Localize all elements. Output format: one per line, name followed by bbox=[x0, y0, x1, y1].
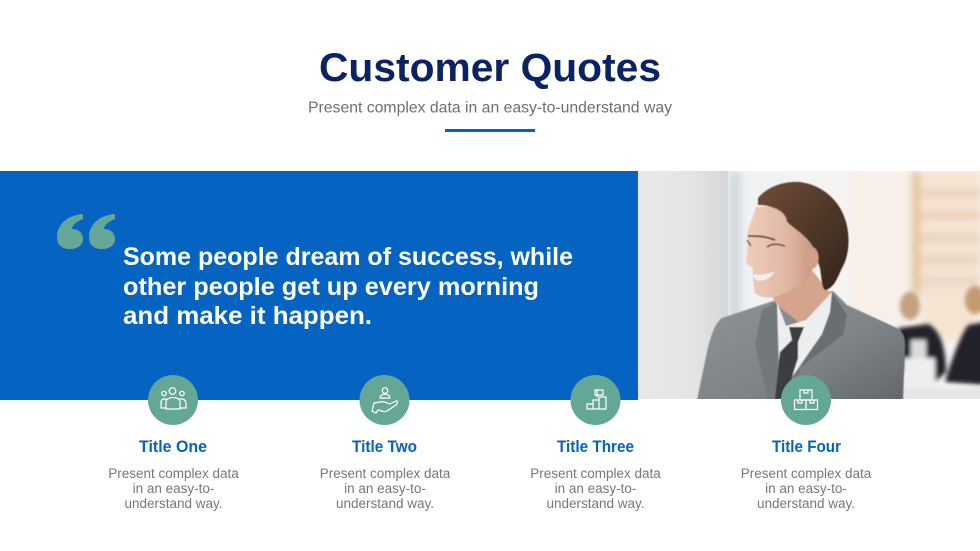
quote text: other people get up every morning bbox=[123, 273, 539, 301]
description bbox=[530, 466, 661, 511]
quote text: Some people dream of success, while bbox=[123, 243, 573, 271]
icon: stacked boxes bbox=[781, 375, 831, 425]
jacket bbox=[697, 182, 905, 400]
icon: growth steps with flag bbox=[570, 375, 620, 425]
smile bbox=[752, 272, 774, 281]
heading: Title Four bbox=[772, 438, 842, 456]
description: Present complex data bbox=[530, 466, 661, 481]
description bbox=[741, 466, 872, 511]
description: in an easy-to- bbox=[555, 481, 636, 496]
panel: quote bbox=[0, 171, 638, 400]
icon: people bbox=[148, 375, 198, 425]
icon: hand with person bbox=[360, 375, 410, 425]
description: Present complex data bbox=[108, 466, 239, 481]
tie bbox=[775, 327, 804, 399]
description: understand way. bbox=[336, 496, 434, 511]
description bbox=[320, 466, 451, 511]
item: title two bbox=[320, 375, 451, 511]
description: in an easy-to- bbox=[765, 481, 847, 496]
hair bbox=[758, 182, 849, 290]
description: understand way. bbox=[546, 496, 645, 511]
description bbox=[108, 466, 239, 511]
title: Customer Quotes bbox=[319, 46, 661, 90]
description: in an easy-to- bbox=[133, 481, 214, 496]
description: understand way. bbox=[124, 496, 223, 511]
item: title three bbox=[530, 375, 661, 511]
neck bbox=[772, 270, 832, 325]
eye and brow bbox=[767, 244, 785, 247]
heading: Title Three bbox=[557, 438, 634, 456]
photo: businessman bbox=[638, 171, 980, 400]
quote text: and make it happen. bbox=[123, 302, 372, 330]
background people bbox=[890, 286, 980, 400]
accent line bbox=[445, 129, 535, 132]
shirt bbox=[776, 292, 833, 376]
description: understand way. bbox=[757, 496, 855, 511]
heading: Title Two bbox=[352, 438, 417, 456]
description: Present complex data bbox=[741, 466, 872, 481]
icon: quotation mark bbox=[57, 214, 115, 249]
face bbox=[746, 205, 818, 298]
item: title one bbox=[108, 375, 239, 511]
item: title four bbox=[741, 375, 872, 511]
quote text bbox=[123, 243, 573, 330]
heading: Title One bbox=[139, 438, 207, 456]
ear bbox=[812, 246, 820, 270]
description: in an easy-to- bbox=[344, 481, 426, 496]
description: Present complex data bbox=[320, 466, 451, 481]
subtitle: Present complex data in an easy-to-understand way bbox=[308, 100, 672, 116]
